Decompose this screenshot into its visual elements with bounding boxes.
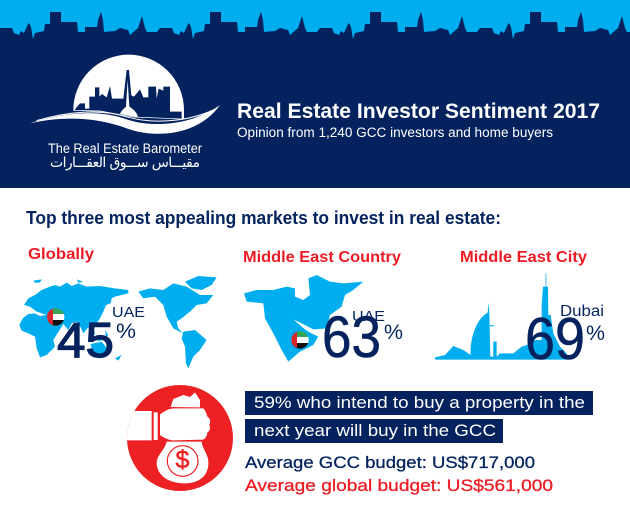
panel heading: Middle East Country: Middle East Country	[243, 249, 401, 266]
panel heading: Middle East City: Middle East City	[460, 249, 587, 266]
logo emblem	[30, 55, 220, 134]
value: UAE 63%: UAE	[352, 309, 385, 325]
value: UAE 45%	[57, 305, 145, 368]
callout: intent to buy: next year will buy in the GCC	[254, 421, 496, 440]
title: Real Estate Investor Sentiment 2017	[237, 99, 600, 123]
Dubai skyline	[435, 273, 567, 360]
value: Dubai 69%: %	[586, 322, 605, 345]
dollar sign: $	[176, 446, 190, 474]
logo name: The Real Estate Barometer	[48, 141, 202, 156]
Middle East map	[244, 275, 363, 362]
value: UAE 45%: %	[116, 320, 136, 343]
callout: intent to buy	[245, 391, 593, 443]
panel: Middle East country	[243, 249, 403, 370]
value: Dubai 69%: Dubai	[560, 303, 604, 320]
logo: The Real Estate Barometer	[30, 55, 220, 171]
value: UAE 63%: 63	[322, 305, 381, 370]
callout: intent to buy: 59% who intend to buy a property in the	[254, 393, 585, 412]
stat: average GCC budget: Average GCC budget: US$717,000	[245, 453, 535, 472]
value: UAE 63%: %	[384, 321, 403, 344]
flag: UAE	[291, 331, 309, 349]
subtitle: Opinion from 1,240 GCC investors and home buyers	[237, 125, 553, 140]
value: Dubai 69%: 69	[525, 306, 585, 372]
flag: UAE	[47, 308, 65, 326]
header band	[0, 0, 630, 188]
world map	[19, 276, 217, 368]
stat: average global budget: Average global budget: US$561,000	[245, 476, 553, 495]
panel heading: Globally: Globally	[28, 246, 94, 263]
value: UAE 45%: UAE	[112, 305, 145, 321]
skyline banner	[0, 0, 630, 60]
section heading: Top three most appealing markets to invest in real estate:	[26, 207, 501, 228]
value: UAE 45%: 45	[57, 314, 114, 368]
panel: globally	[19, 246, 217, 368]
logo Arabic name: مقيـــاس ســـوق العقـــارات	[50, 155, 200, 171]
panel: Middle East city	[435, 249, 605, 372]
icon: hand holding money bag	[125, 385, 233, 491]
